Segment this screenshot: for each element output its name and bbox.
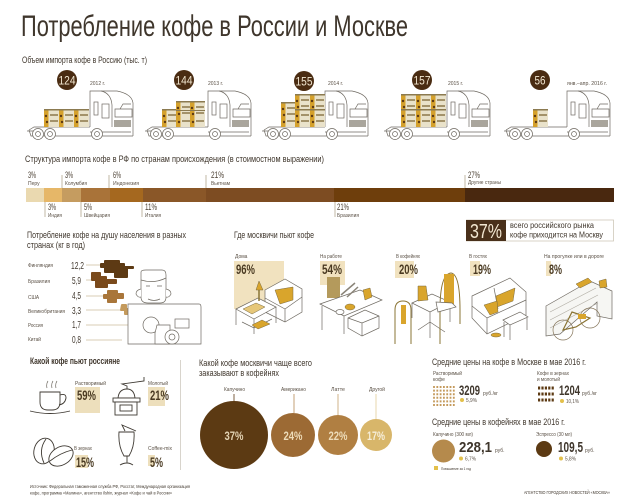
bubble chart: cafe orders: 17%	[367, 429, 385, 443]
truck 2014: 2014 г.	[328, 81, 343, 87]
source note: кофе, программа «Малина», агентство Ilshin, журнал «Кофе и чай в России»	[30, 490, 172, 496]
stacked bar: import by country	[26, 188, 614, 202]
price: instant coffee: 3209	[459, 382, 480, 398]
place: home: Дома	[235, 254, 248, 260]
bar labels: Перу	[28, 181, 40, 187]
truck 2015	[384, 70, 490, 140]
consumption list: Россия	[28, 323, 43, 329]
bar labels: Индия	[48, 213, 62, 219]
truck 2013: 144	[176, 74, 193, 88]
truck 2015: 2015 г.	[448, 81, 463, 87]
type: ground: 21%	[150, 387, 169, 403]
legend: yearly increase: Повышение за 1 год	[441, 466, 472, 471]
type: coffee-mix: Coffee-mix	[148, 446, 172, 452]
place: cafe: В кофейнях	[396, 253, 420, 260]
truck 2012	[27, 70, 133, 140]
place: walk: На прогулке или в дороге	[544, 254, 604, 260]
bar labels: Индонезия	[113, 181, 139, 187]
type: coffee-mix: 5%	[150, 454, 163, 470]
price: beans and ground coffee: 1204	[559, 382, 580, 398]
illustration: person drinking coffee	[128, 270, 201, 344]
truck 2016: 56	[534, 74, 546, 88]
bar labels: 21%	[337, 202, 349, 212]
bar labels: 21%	[211, 170, 224, 180]
place: work: На работе	[320, 254, 342, 260]
price: beans and ground coffee: 10,1%	[566, 399, 579, 405]
divider	[180, 360, 181, 470]
heading: what Muscovites order	[199, 358, 312, 378]
bar labels: Италия	[145, 213, 161, 219]
place: work: 54%	[322, 261, 342, 277]
bubble chart: cafe orders	[200, 386, 392, 469]
coffee blobs	[92, 261, 140, 324]
bar labels: 3%	[65, 170, 73, 180]
callout: 37 percent	[466, 220, 614, 243]
title: Потребление кофе в России и Москве	[21, 10, 408, 43]
consumption list: Китай	[28, 336, 41, 343]
price: beans and ground coffee	[537, 371, 597, 405]
consumption list: 1,7	[72, 320, 81, 331]
truck 2015: 157	[414, 74, 431, 88]
truck chart: import volume	[27, 70, 610, 140]
place: guests: 19%	[473, 261, 491, 277]
price: beans and ground coffee: Кофе в зернах	[537, 371, 569, 377]
type: beans	[31, 436, 94, 470]
consumption list: 0,8	[72, 335, 81, 346]
bar labels: 3%	[28, 170, 36, 180]
price: cappuccino: 6,7%	[465, 456, 477, 462]
bubble chart: cafe orders: 24%	[284, 429, 303, 443]
truck 2014: 155	[296, 74, 313, 88]
bar labels: 6%	[113, 170, 121, 180]
legend: yearly increase	[434, 466, 472, 471]
price: espresso: Эспрессо (30 мл)	[536, 432, 572, 438]
bubble chart: cafe orders: Латте	[331, 387, 345, 393]
place: walk	[544, 254, 612, 340]
bubble chart: cafe orders: 37%	[224, 429, 244, 443]
heading: import structure: Структура импорта кофе в РФ по странам происхождения (в стоимостном выражении)	[25, 154, 324, 164]
callout: 37 percent: кофе приходится на Москву	[510, 230, 603, 240]
price: cappuccino: Капучино (300 мл)	[433, 432, 473, 438]
truck 2012: 2012 г.	[90, 81, 105, 87]
price: espresso: руб.	[585, 448, 595, 454]
price: beans and ground coffee: и молотый	[537, 376, 560, 383]
consumption list: Финляндия	[28, 263, 53, 269]
truck 2012: 124	[58, 74, 76, 88]
heading: import volume: Объем импорта кофе в Россию (тыс. т)	[22, 55, 147, 65]
callout: 37 percent: всего российского рынка	[510, 221, 594, 230]
truck 2016	[504, 70, 610, 140]
heading: cafe prices: Средние цены в кофейнях в мае 2016 г.	[432, 417, 565, 427]
type: beans: 15%	[76, 454, 94, 470]
type: instant: 59%	[77, 387, 96, 403]
truck 2013	[145, 70, 251, 140]
source note: Источник: Федеральная таможенная служба РФ, Росстат, Международная организация	[30, 484, 190, 489]
consumption list: 3,3	[72, 306, 81, 317]
bar labels: Швейцария	[84, 212, 110, 219]
place: work	[320, 254, 382, 336]
bar labels: Колумбия	[65, 181, 87, 187]
price: cappuccino: 228,1	[459, 439, 492, 456]
price: instant coffee: Растворимый	[433, 370, 462, 377]
consumption list: Бразилия	[28, 279, 50, 285]
bar labels: Вьетнам	[211, 181, 231, 187]
source note	[30, 484, 190, 496]
bar labels: 5%	[84, 202, 92, 212]
type: ground	[113, 377, 169, 415]
price: instant coffee	[433, 370, 498, 407]
consumption list: 5,9	[72, 276, 81, 287]
consumption list	[28, 261, 133, 346]
place: guests: В гостях	[469, 254, 487, 260]
place: home	[234, 254, 302, 334]
place: cafe: 20%	[399, 261, 418, 277]
truck 2016: янв.–апр. 2016 г.	[567, 81, 607, 87]
bar labels: 11%	[145, 202, 157, 212]
place: guests	[469, 254, 528, 340]
heading: what Muscovites order: Какой кофе москвичи чаще всего	[199, 358, 312, 368]
bar labels: 27%	[468, 170, 480, 180]
price: espresso	[536, 432, 595, 462]
place: cafe	[395, 253, 460, 344]
place: home: 96%	[236, 261, 255, 277]
price: espresso: 109,5	[558, 439, 583, 456]
type: instant	[30, 380, 106, 414]
type: coffee-mix	[119, 425, 172, 470]
bar labels: Другие страны	[468, 180, 501, 186]
bubble chart: cafe orders: Другой	[369, 386, 385, 393]
bar labels: Бразилия	[337, 213, 359, 219]
price: cappuccino: руб.	[495, 448, 505, 454]
callout: 37 percent: 37%	[470, 221, 502, 243]
type: ground: Молотый	[148, 380, 168, 387]
bubble chart: cafe orders: Американо	[281, 387, 306, 393]
heading: consumption per capita: Потребление кофе на душу населения в разных	[27, 230, 186, 240]
truck 2014	[262, 71, 368, 140]
price: instant coffee: 5,9%	[466, 398, 478, 404]
heading: consumption per capita	[27, 230, 186, 250]
heading: consumption per capita: странах (кг в год)	[27, 240, 85, 250]
place: walk: 8%	[549, 261, 562, 277]
price: beans and ground coffee: руб./кг	[582, 391, 597, 397]
agency credit: АГЕНТСТВО ГОРОДСКИХ НОВОСТЕЙ «МОСКВА»	[524, 488, 610, 495]
price: instant coffee: кофе	[433, 377, 445, 383]
consumption list: 12,2	[71, 261, 84, 272]
heading: where Muscovites drink coffee: Где москвичи пьют кофе	[234, 230, 314, 240]
bar labels: 3%	[48, 202, 56, 212]
heading: retail prices: Средние цены на кофе в Москве в мае 2016 г.	[432, 357, 586, 367]
price: espresso: 5,8%	[565, 456, 577, 462]
type: beans: В зернах	[74, 446, 92, 452]
consumption list: Великобритания	[28, 309, 65, 315]
price: cappuccino	[432, 432, 505, 462]
truck 2013: 2013 г.	[208, 81, 223, 87]
consumption list: США	[28, 295, 40, 301]
heading: what Muscovites order: заказывают в кофейнях	[199, 368, 279, 378]
type: instant: Растворимый	[75, 380, 106, 387]
bubble chart: cafe orders: Капучино	[224, 387, 245, 393]
price: instant coffee: руб./кг	[483, 391, 498, 397]
consumption list: 4,5	[72, 291, 81, 302]
bubble chart: cafe orders: 22%	[328, 429, 348, 443]
heading: what Russians drink: Какой кофе пьют россияне	[30, 356, 120, 366]
bar labels	[28, 170, 501, 219]
